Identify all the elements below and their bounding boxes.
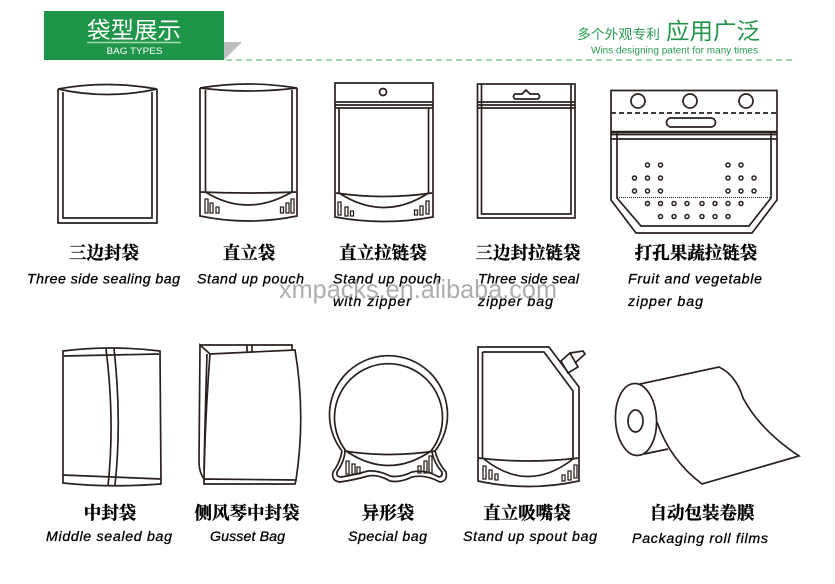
bag: gusset: [199, 345, 301, 484]
label: stand up pouch with zipper: 直立拉链袋: [339, 243, 427, 263]
label: fruit and vegetable zipper bag: [627, 243, 762, 310]
bag: three side sealing: [58, 84, 157, 223]
label: three side seal zipper bag: 三边封拉链袋: [476, 243, 580, 263]
slogan: 多个外观专利: [577, 26, 660, 42]
slogan: 应用广泛: [666, 18, 760, 44]
bag: special shape: [329, 356, 448, 482]
slogan: [577, 18, 760, 56]
header banner: BAG TYPES: [106, 46, 162, 57]
label: stand up pouch: [197, 243, 304, 288]
label: fruit and vegetable zipper bag: 打孔果蔬拉链袋: [635, 243, 757, 263]
label: middle sealed bag: Middle sealed bag: [46, 529, 172, 545]
bag: middle sealed: [63, 348, 161, 486]
header banner: [44, 11, 242, 60]
label: fruit and vegetable zipper bag: Fruit and vegetable: [628, 272, 762, 288]
label: special bag: Special bag: [348, 529, 427, 545]
label: fruit and vegetable zipper bag: zipper bag: [627, 294, 703, 310]
label: packaging roll films: [632, 503, 768, 547]
spout: [561, 351, 585, 373]
bag: stand up pouch: [200, 84, 297, 221]
label: special bag: 异形袋: [362, 503, 414, 523]
perforation dots: [632, 163, 756, 218]
label: stand up pouch with zipper: with zipper: [333, 294, 412, 310]
label: stand up spout bag: [463, 503, 597, 545]
label: three side seal zipper bag: zipper bag: [477, 294, 553, 310]
bag: three side seal zipper: [478, 84, 575, 218]
label: three side sealing bag: [27, 243, 180, 288]
label: gusset bag: 侧风琴中封袋: [194, 503, 300, 523]
label: special bag: [348, 503, 427, 545]
label: packaging roll films: Packaging roll films: [632, 531, 768, 547]
bag: stand up pouch with zipper: [335, 83, 433, 222]
label: stand up spout bag: 直立吸嘴袋: [483, 503, 571, 523]
bag: stand up spout: [478, 347, 585, 486]
label: three side sealing bag: Three side sealing bag: [27, 272, 180, 288]
label: gusset bag: Gusset Bag: [210, 529, 285, 545]
label: middle sealed bag: 中封袋: [84, 503, 136, 523]
header banner: 袋型展示: [87, 17, 181, 43]
label: stand up pouch with zipper: [333, 243, 441, 310]
label: three side seal zipper bag: [476, 243, 580, 310]
watermark: xmpacks.en.alibaba.com: [279, 274, 557, 304]
label: packaging roll films: 自动包装卷膜: [650, 503, 755, 523]
slogan: Wins designing patent for many times: [591, 46, 758, 56]
label: stand up spout bag: Stand up spout bag: [463, 529, 597, 545]
label: stand up pouch with zipper: Stand up pouch: [333, 272, 441, 288]
bag: fruit and vegetable zipper: [611, 90, 777, 233]
label: gusset bag: [194, 503, 300, 545]
label: three side seal zipper bag: Three side seal: [478, 272, 580, 288]
label: three side sealing bag: 三边封袋: [69, 243, 139, 263]
label: middle sealed bag: [46, 503, 172, 545]
label: stand up pouch: Stand up pouch: [197, 272, 304, 288]
packaging roll film: [614, 367, 799, 484]
label: stand up pouch: 直立袋: [223, 243, 275, 263]
